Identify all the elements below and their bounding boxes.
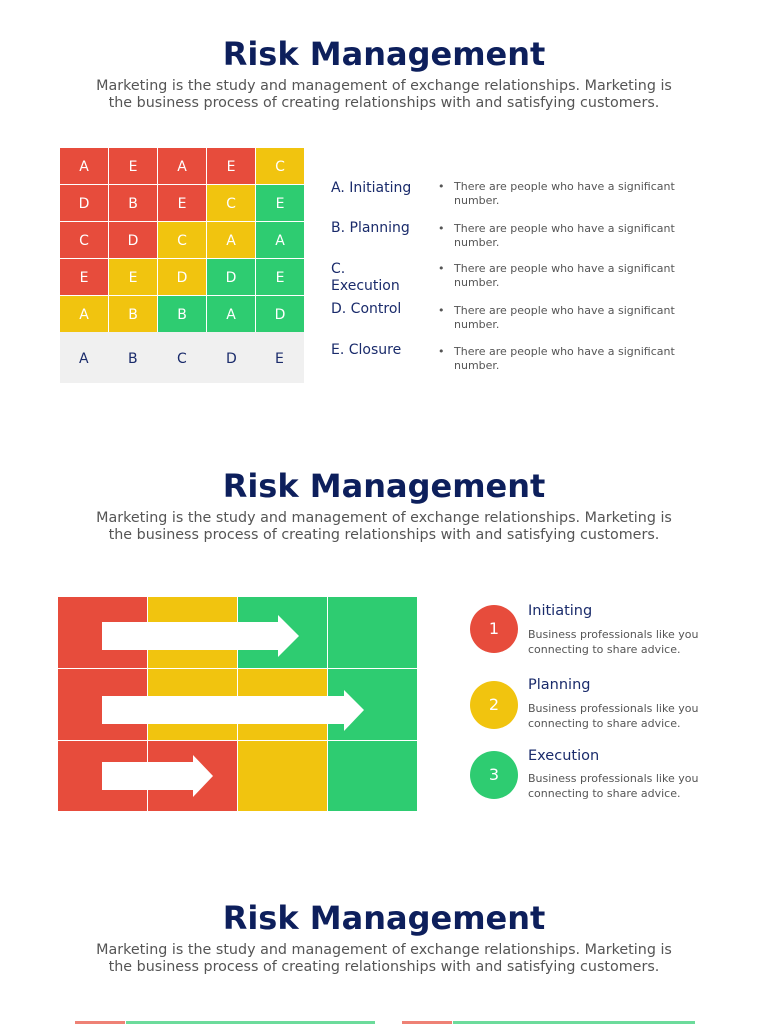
risk matrix grid: B — [128, 307, 138, 323]
subtitle 3 — [96, 942, 672, 975]
legend labels: • — [438, 304, 444, 317]
subtitle 3: the business process of creating relationships with and satisfying customers. — [109, 959, 659, 975]
risk matrix grid: E — [80, 270, 88, 286]
legend labels: C. — [331, 261, 345, 277]
step list: 2 — [489, 695, 499, 714]
step list: connecting to share advice. — [528, 716, 680, 730]
arrow grid chart — [58, 597, 417, 811]
step list: 3 — [489, 765, 499, 784]
risk matrix grid: D — [79, 196, 89, 212]
risk matrix grid: D — [128, 233, 138, 249]
risk matrix grid: E — [178, 196, 186, 212]
legend labels: A. Initiating — [331, 180, 411, 196]
step list: connecting to share advice. — [528, 786, 680, 800]
risk matrix grid: B — [128, 196, 138, 212]
bottom chart edges — [75, 1021, 695, 1024]
axis labels row: E — [275, 351, 284, 367]
step list: 1 — [489, 619, 499, 638]
risk matrix grid: D — [226, 270, 236, 286]
arrows — [102, 615, 364, 797]
legend labels: • — [438, 262, 444, 275]
risk matrix grid: C — [79, 233, 89, 249]
axis labels row — [60, 332, 304, 383]
step list: Execution — [528, 748, 599, 764]
risk matrix grid: E — [227, 159, 235, 175]
step list: Business professionals like you — [528, 772, 698, 785]
risk matrix grid: C — [226, 196, 236, 212]
step list: Business professionals like you — [528, 702, 698, 715]
axis labels row: B — [128, 351, 138, 367]
risk matrix grid: A — [177, 159, 187, 175]
axis labels row: A — [79, 351, 89, 367]
risk matrix grid: D — [177, 270, 187, 286]
risk matrix grid: C — [177, 233, 187, 249]
step list — [470, 603, 698, 800]
title 3: Risk Management — [223, 899, 545, 937]
subtitle 1: Marketing is the study and management of exchange relationships. Marketing is — [96, 78, 672, 94]
legend labels: E. Closure — [331, 342, 401, 358]
risk matrix grid: E — [276, 196, 284, 212]
legend labels — [331, 180, 675, 372]
legend labels: There are people who have a significant number. — [454, 222, 675, 248]
subtitle 2 — [96, 510, 672, 543]
legend labels: There are people who have a significant number. — [454, 345, 675, 372]
risk matrix grid: A — [79, 307, 89, 323]
legend labels: • — [438, 345, 444, 358]
legend labels: • — [438, 222, 444, 235]
risk matrix grid: C — [275, 159, 285, 175]
step list: Business professionals like you — [528, 628, 698, 641]
title 2: Risk Management — [223, 467, 545, 505]
risk matrix grid: A — [79, 159, 89, 175]
subtitle 1: the business process of creating relationships with and satisfying customers. — [109, 95, 659, 111]
subtitle 2: the business process of creating relationships with and satisfying customers. — [109, 527, 659, 543]
subtitle 1 — [96, 78, 672, 111]
risk matrix grid: D — [275, 307, 285, 323]
step list: Planning — [528, 677, 590, 693]
risk matrix grid: E — [129, 159, 137, 175]
risk matrix grid: A — [226, 233, 236, 249]
legend labels: Execution — [331, 278, 400, 294]
risk matrix grid: E — [276, 270, 284, 286]
legend labels: B. Planning — [331, 220, 410, 236]
risk matrix grid — [60, 148, 304, 383]
subtitle 3: Marketing is the study and management of exchange relationships. Marketing is — [96, 942, 672, 958]
subtitle 2: Marketing is the study and management of exchange relationships. Marketing is — [96, 510, 672, 526]
risk matrix grid: A — [226, 307, 236, 323]
title 1: Risk Management — [223, 35, 545, 73]
risk matrix grid: A — [275, 233, 285, 249]
step list: connecting to share advice. — [528, 642, 680, 656]
legend labels: • — [438, 180, 444, 193]
legend labels: There are people who have a significant number. — [454, 180, 675, 206]
legend labels: D. Control — [331, 301, 401, 317]
axis labels row: C — [177, 351, 187, 367]
step list: Initiating — [528, 603, 592, 619]
axis labels row: D — [226, 351, 237, 367]
risk matrix grid: B — [177, 307, 187, 323]
legend labels: There are people who have a significant number. — [454, 304, 675, 330]
legend labels: There are people who have a significant number. — [454, 262, 675, 288]
risk matrix grid: E — [129, 270, 137, 286]
